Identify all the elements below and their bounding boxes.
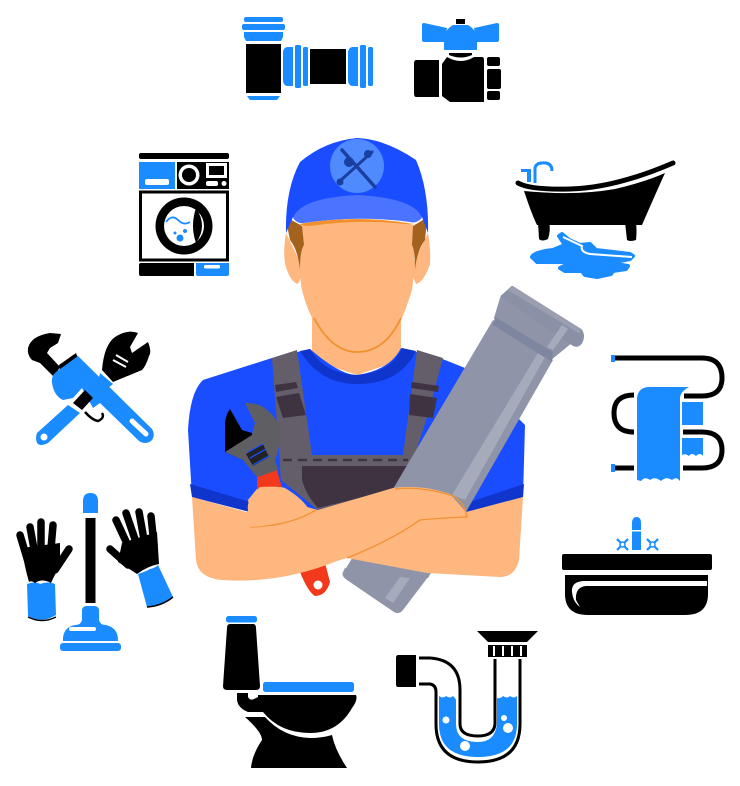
face [300, 222, 414, 352]
shirt collar and sleeve bands [190, 348, 524, 514]
adjustable wrench [225, 403, 282, 492]
figure: plumber [188, 138, 583, 613]
icon: right glove [110, 512, 173, 607]
cap badge [330, 139, 384, 193]
icon: plunger [60, 493, 121, 651]
icon: P-trap drain [396, 631, 538, 762]
arms [192, 485, 523, 581]
icon: left glove [20, 522, 69, 620]
arm crease lines [250, 488, 467, 558]
icon: heated towel rail [611, 355, 722, 481]
shirt [188, 348, 525, 512]
cap [286, 138, 428, 233]
icon: bathtub with leak [518, 163, 673, 277]
icon: washing machine [139, 153, 229, 276]
spanner tail [300, 563, 330, 596]
chin line [314, 318, 401, 352]
overalls straps and bib [272, 350, 443, 510]
icon: toilet [223, 616, 356, 768]
neck and ears [284, 233, 430, 375]
pipe [342, 286, 583, 613]
icon: pipe fitting [242, 17, 373, 100]
hair [288, 218, 426, 270]
hand fingers [247, 487, 310, 527]
icon: wash basin [562, 517, 712, 615]
icon: crossed wrenches [28, 332, 154, 445]
icon: ball valve [414, 19, 501, 102]
spanner tail hole [313, 580, 323, 590]
